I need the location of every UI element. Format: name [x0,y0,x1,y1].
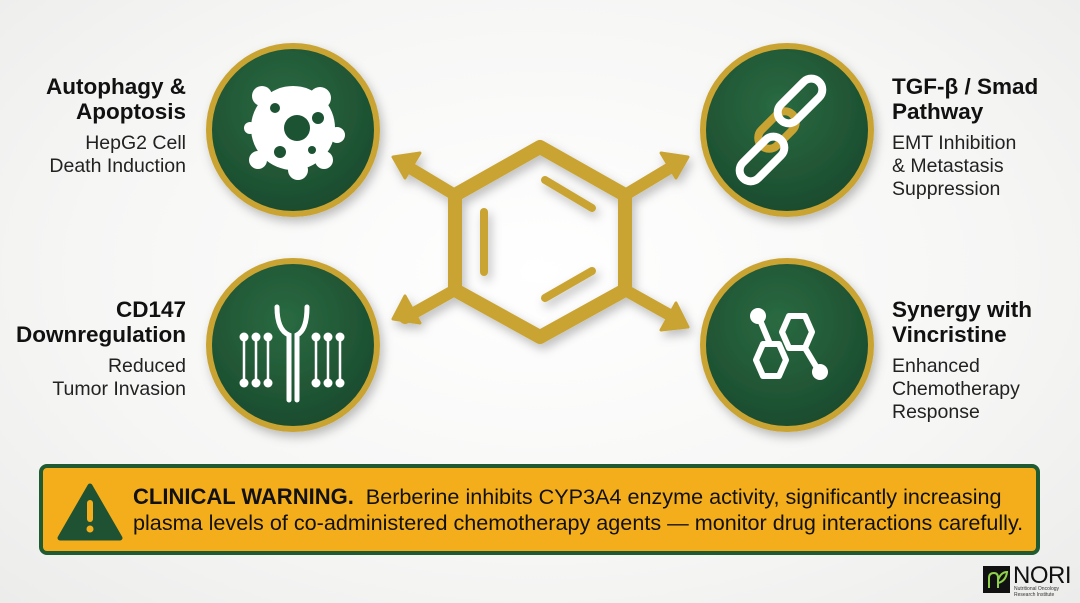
label: synergy: Synergy with [892,297,1032,322]
label: autophagy: HepG2 Cell [85,132,186,154]
text: warning: CLINICAL WARNING. Berberine inhibits CYP3A4 enzyme activity, significantly increasing [133,484,1002,509]
icon: cell [244,86,345,180]
icon: linked molecules [756,316,817,376]
text: warning: plasma levels of co-administered chemotherapy agents — monitor drug interactions carefully. [133,510,1023,535]
callout: clinical warning [39,464,1040,555]
logo: NORI: Nutritional Oncology [1014,586,1059,592]
label: synergy [892,297,1032,423]
icon: membrane receptor [244,307,340,400]
label: autophagy: Apoptosis [76,99,186,124]
label: synergy: Chemotherapy [892,378,1020,400]
label: TGF: Suppression [892,178,1000,200]
label: synergy: Response [892,401,980,423]
logo: NORI: NORI [1013,562,1071,589]
panel: autophagy circle [206,43,380,217]
icon: warning triangle [58,484,122,540]
text: warning [133,484,1023,535]
logo: NORI [983,562,1071,598]
icon: berberine hexagon with arrows [393,147,688,337]
diagram [204,42,882,442]
label: TGF [892,74,1038,200]
label: synergy: Enhanced [892,355,980,377]
label: autophagy: Death Induction [49,155,186,177]
label: CD147: Tumor Invasion [52,378,186,400]
label: CD147: Downregulation [16,322,186,347]
panel: TGF circle [700,43,874,217]
label: TGF: Pathway [892,99,983,124]
panel: CD147 circle [206,258,380,432]
panel: synergy circle [700,258,874,432]
label: TGF: EMT Inhibition [892,132,1016,154]
label: autophagy [46,74,186,177]
label: CD147 [16,297,186,400]
label: TGF: & Metastasis [892,155,1004,177]
label: CD147: CD147 [116,297,186,322]
label: autophagy: Autophagy & [46,74,186,99]
icon: chain [735,74,827,186]
logo: NORI: Research Institute [1014,592,1054,598]
label: CD147: Reduced [108,355,186,377]
label: TGF: TGF-β / Smad [892,74,1038,99]
label: synergy: Vincristine [892,322,1007,347]
